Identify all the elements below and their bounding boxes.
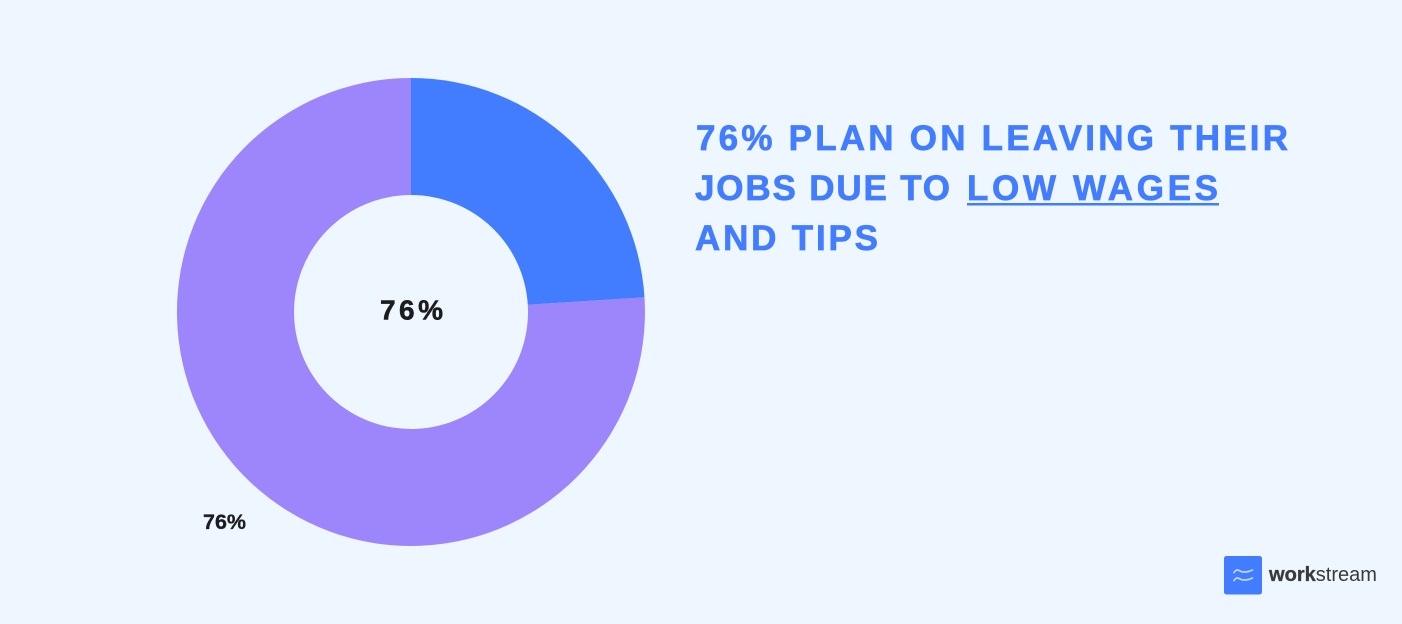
headline (695, 119, 1288, 258)
donut segment: 76% purple (177, 78, 645, 546)
headline emphasis: low wages: LOW WAGES (967, 169, 1218, 208)
donut segment: 24% blue (411, 78, 644, 305)
wordmark: workstream (1268, 564, 1377, 586)
headline line 2: JOBS DUE TO (695, 169, 950, 208)
headline line 3: AND TIPS (695, 219, 878, 258)
icon: waves on blue square (1224, 556, 1262, 594)
donut chart (177, 78, 645, 546)
headline line 1: 76% PLAN ON LEAVING THEIR (696, 119, 1288, 158)
workstream logo (1224, 556, 1377, 594)
center value: 76% (380, 294, 443, 326)
segment label: 76% (203, 511, 246, 534)
